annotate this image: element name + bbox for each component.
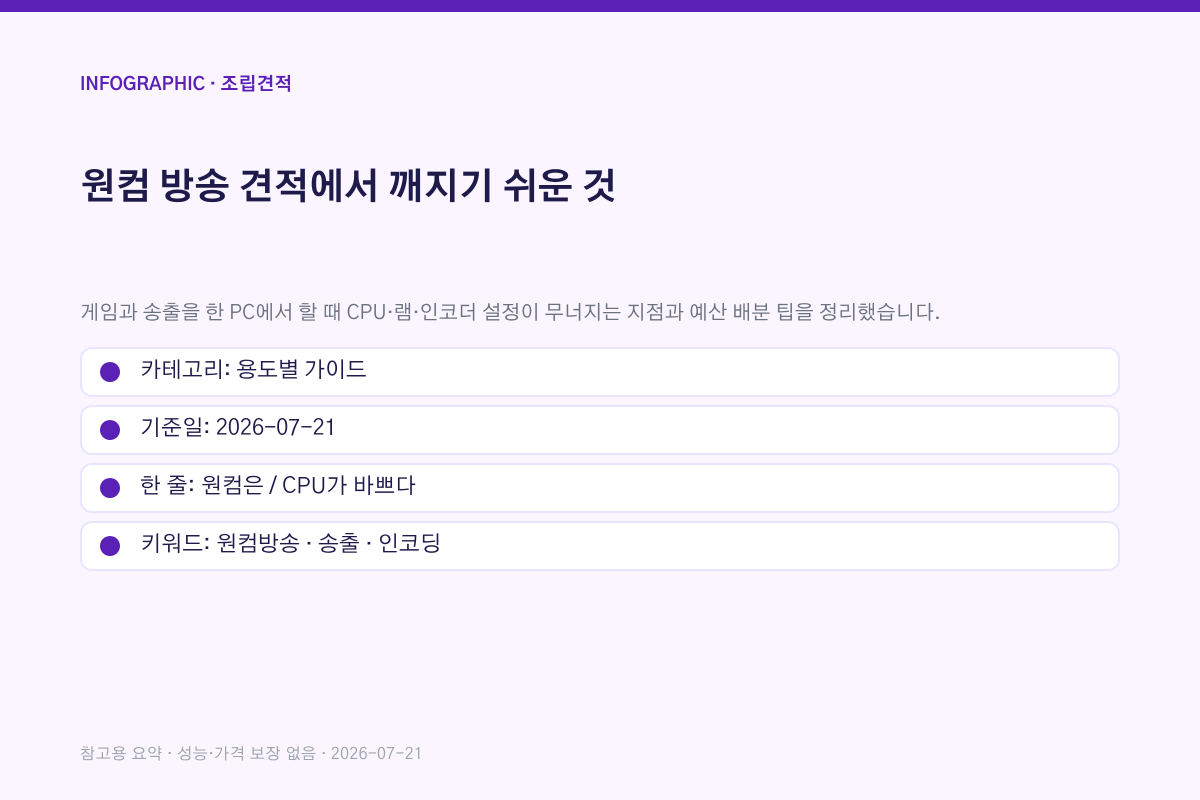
icon: bullet dot bbox=[100, 536, 120, 556]
top accent bar bbox=[0, 0, 1200, 12]
description text: 게임과 송출을 한 PC에서 할 때 CPU·램·인코더 설정이 무너지는 지점과 예산 배분 팁을 정리했습니다. bbox=[80, 304, 941, 324]
icon: bullet dot bbox=[100, 478, 120, 498]
list row: keywords bbox=[80, 521, 1120, 571]
text: date: 기준일: 2026-07-21 bbox=[140, 418, 337, 440]
text: keywords: 키워드: 원컴방송 · 송출 · 인코딩 bbox=[140, 534, 441, 556]
list row: category bbox=[80, 347, 1120, 397]
list row: one-liner bbox=[80, 463, 1120, 513]
list row: date bbox=[80, 405, 1120, 455]
icon: bullet dot bbox=[100, 362, 120, 382]
title: 원컴 방송 견적에서 깨지기 쉬운 것 bbox=[80, 171, 616, 207]
text: one-liner: 한 줄: 원컴은 / CPU가 바쁘다 bbox=[140, 476, 416, 498]
footer note: 참고용 요약 · 성능·가격 보장 없음 · 2026-07-21 bbox=[80, 747, 423, 763]
eyebrow label: INFOGRAPHIC · 조립견적 bbox=[80, 76, 292, 94]
text: category: 카테고리: 용도별 가이드 bbox=[140, 360, 367, 382]
icon: bullet dot bbox=[100, 420, 120, 440]
